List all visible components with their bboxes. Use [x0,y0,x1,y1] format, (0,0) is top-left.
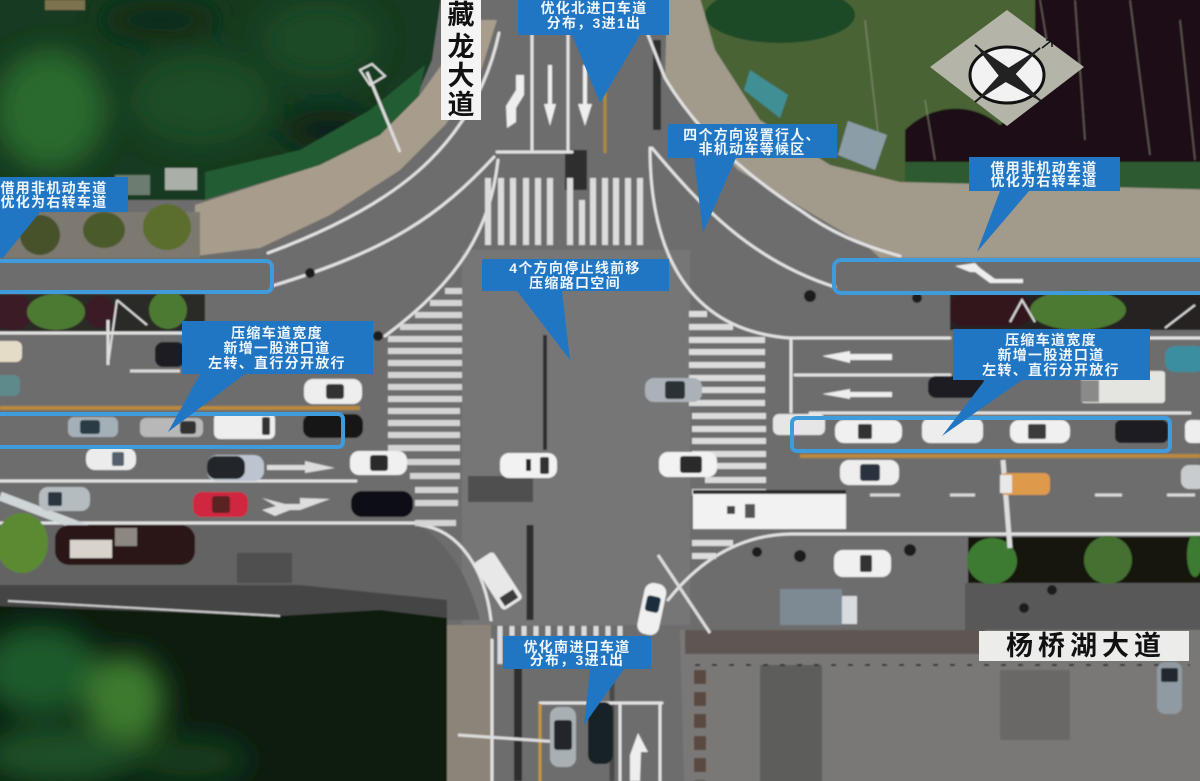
vehicles east [693,346,1200,625]
southwest green space [0,601,447,781]
icon: compass [930,10,1084,126]
callout: east borrowed lane: 借用非机动车道 [990,160,1098,176]
highlight: east road lower lane [792,418,1170,451]
callout: south approach: 优化南进口车道 [523,639,631,655]
callout: south approach: 分布，3进1出 [530,652,624,668]
pavement dark cracks [518,40,657,781]
northwest green space [0,0,445,200]
callout: west lane width: 压缩车道宽度 [231,325,323,341]
crosswalk south [500,626,620,664]
callout: north approach: 分布，3进1出 [547,15,641,31]
callout: north approach [518,0,669,103]
callout: waiting area: 非机动车等候区 [698,141,806,157]
south sidewalk [447,625,491,781]
road name: Canglong Avenue [441,0,481,120]
vehicles west [0,341,413,517]
northwest median with shrubs [0,204,200,258]
arrow: west straight right [262,498,330,516]
arrow: east straight 1 [822,351,892,363]
highlight: west road upper lane [0,261,272,292]
callout: west borrowed lane [0,177,128,258]
orange centre lines [0,408,1200,456]
northeast sidewalk [665,0,1200,258]
arrow: north left turn [506,75,524,128]
road name: Yangqiaohu Avenue: 杨桥湖大道 [1006,631,1166,661]
highlight: east road upper lane [834,260,1200,293]
callout: east lane width [942,329,1150,436]
callout: stop lines: 压缩路口空间 [529,275,621,291]
arrow: east straight 2 [822,389,892,399]
callout: west lane width [168,321,373,432]
callout: waiting area: 四个方向设置行人、 [683,127,821,143]
crosswalk north [488,178,640,245]
callout: waiting area [668,124,837,233]
arrow: north straight [544,65,556,126]
callout: west lane width: 新增一股进口道 [223,340,331,356]
callout: stop lines [482,259,669,360]
northwest sidewalk [195,20,497,256]
callout: east borrowed lane [969,157,1120,252]
lane dashes [130,371,1195,495]
east median with shrubs [950,290,1200,330]
road name: Canglong Avenue: 道 [448,90,474,120]
dark patches [237,476,533,583]
centre of intersection [462,250,690,625]
arrow: east right turn lane [955,263,1023,283]
callout: east lane width: 压缩车道宽度 [1005,332,1097,348]
southeast median with shrubs [967,533,1200,584]
west median with shrubs [0,291,205,365]
crosswalk west [388,291,462,523]
callout: north approach: 优化北进口车道 [540,0,648,16]
callout: west lane width: 左转、直行分开放行 [208,355,346,371]
callout: east lane width: 左转、直行分开放行 [982,362,1120,378]
arrow: south [630,733,648,781]
southwest shaded slab [0,525,480,620]
road name: Canglong Avenue: 藏 [448,0,474,30]
arrow: west straight [267,461,335,473]
callout: east lane width: 新增一股进口道 [997,347,1105,363]
southeast pavement [680,583,1200,781]
arrow: north straight 2 [578,65,592,126]
road name: Canglong Avenue: 大 [448,61,474,91]
pedestrians and cyclists [305,268,1057,613]
callout: stop lines: 4个方向停止线前移 [509,260,641,276]
callout: south approach [503,636,651,725]
northeast green space [690,0,1200,195]
highlight: west road lower lane [0,414,343,447]
light poles [0,64,1010,742]
callout: west borrowed lane: 优化为右转车道 [0,194,108,210]
crosswalk east [689,314,766,556]
west tree and parked truck [0,513,195,573]
road name: Canglong Avenue: 龙 [448,32,474,62]
vehicles south [550,662,1182,767]
vehicles centre [473,378,717,637]
callout: east borrowed lane: 优化为右转车道 [990,173,1098,189]
callout: west borrowed lane: 借用非机动车道 [0,180,108,196]
